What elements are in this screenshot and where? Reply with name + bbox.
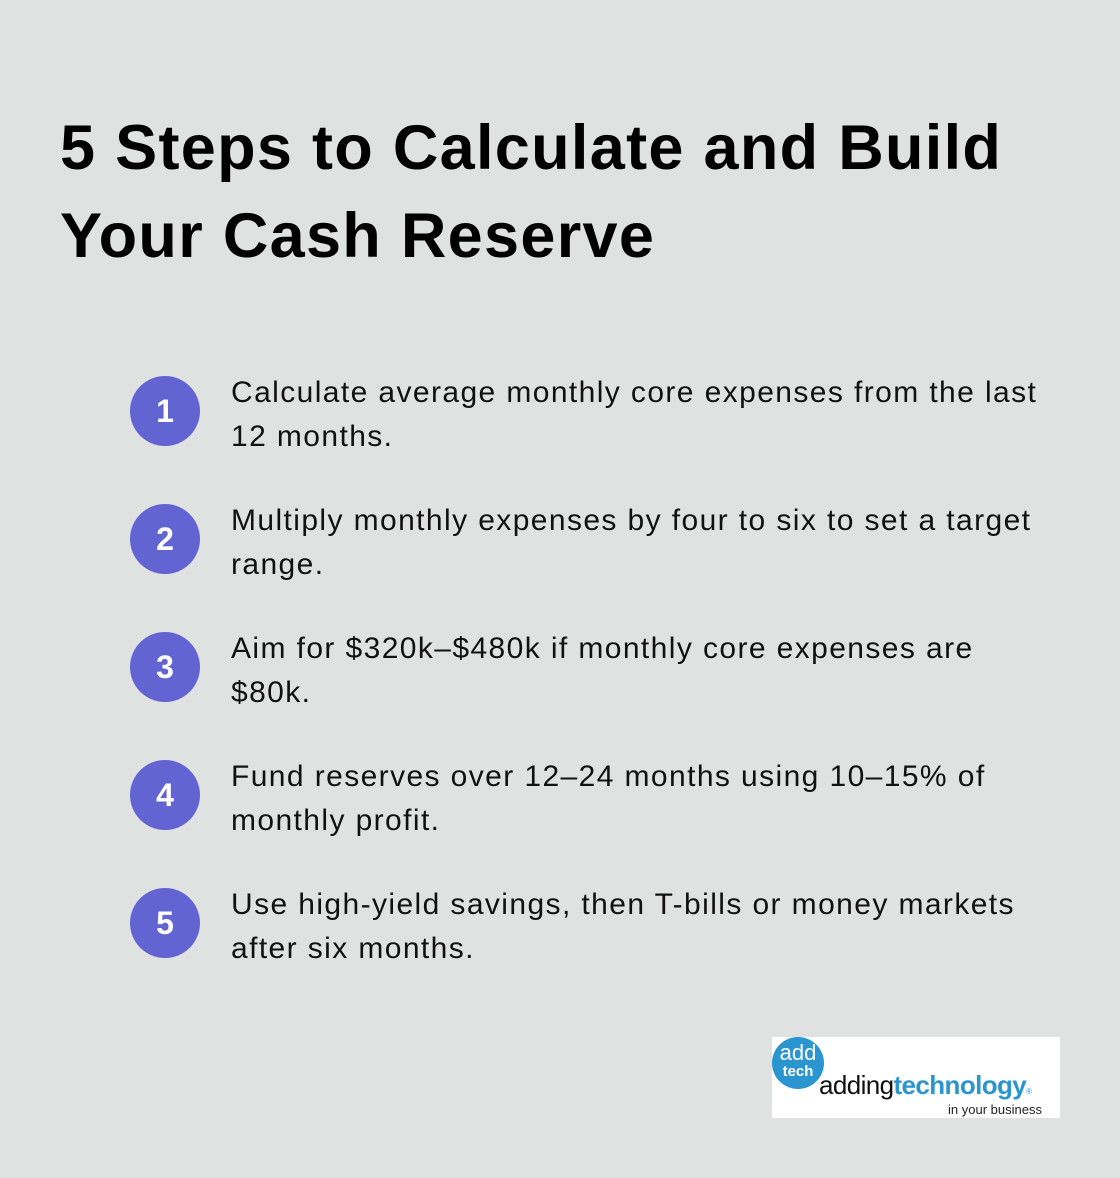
- step 2: Multiply monthly expenses by four to six to set a target: [231, 504, 1031, 537]
- step 2: [130, 504, 1031, 581]
- step 2: range.: [231, 548, 324, 581]
- step 5: 5: [156, 905, 174, 941]
- step 5: Use high-yield savings, then T-bills or money markets: [231, 888, 1015, 921]
- logo: addingtechnology®: [819, 1070, 1031, 1100]
- step 2: 2: [156, 521, 174, 557]
- step 1: Calculate average monthly core expenses from the last: [231, 376, 1037, 409]
- step 1: 12 months.: [231, 420, 393, 453]
- step 1: 1: [156, 393, 174, 429]
- step 3: $80k.: [231, 676, 311, 709]
- logo: [772, 1037, 1060, 1118]
- step 5: [130, 888, 1015, 965]
- logo: tech: [783, 1063, 813, 1080]
- title: 5 Steps to Calculate and Build: [60, 113, 1002, 183]
- step 5: after six months.: [231, 932, 475, 965]
- step 4: Fund reserves over 12–24 months using 10–15% of: [231, 760, 986, 793]
- title: [60, 113, 1002, 271]
- step 1: [130, 376, 1037, 453]
- logo: add: [780, 1040, 816, 1065]
- step 4: [130, 760, 986, 837]
- title: Your Cash Reserve: [60, 201, 655, 271]
- step 4: monthly profit.: [231, 804, 440, 837]
- step 4: 4: [156, 777, 174, 813]
- logo: in your business: [948, 1102, 1042, 1117]
- step 3: [130, 632, 974, 709]
- step 3: Aim for $320k–$480k if monthly core expenses are: [231, 632, 974, 665]
- step 3: 3: [156, 649, 174, 685]
